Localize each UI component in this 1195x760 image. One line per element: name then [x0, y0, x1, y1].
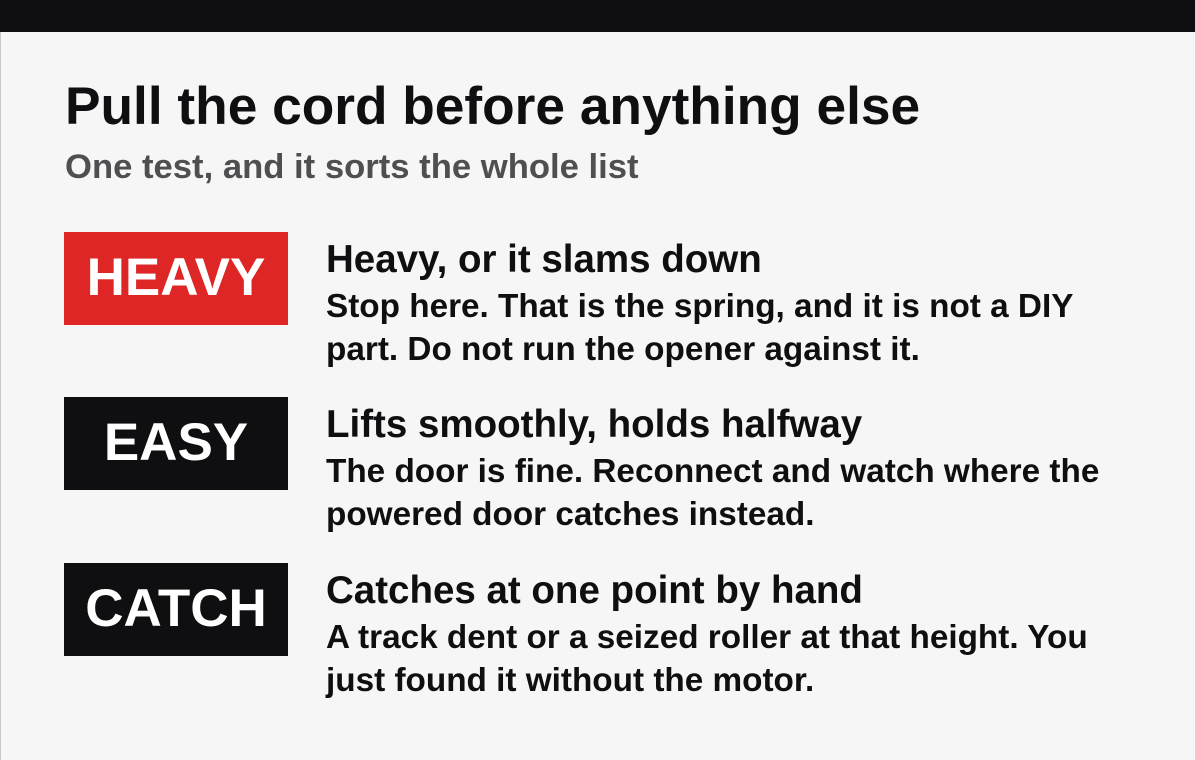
top bar [0, 0, 1195, 32]
description: catch: A track dent or a seized roller at that height. You [326, 619, 1088, 656]
description: heavy: part. Do not run the opener against it. [326, 331, 920, 368]
panel: easy row [64, 397, 1099, 533]
title: Pull the cord before anything else [65, 77, 920, 136]
left edge line [0, 0, 1, 760]
badge: easy [64, 397, 288, 490]
panel: heavy row [64, 232, 1073, 368]
heading: heavy: Heavy, or it slams down [326, 238, 762, 281]
description: easy [326, 453, 1099, 533]
badge: easy: EASY [104, 413, 248, 472]
badge: catch [64, 563, 288, 656]
subtitle: One test, and it sorts the whole list [65, 148, 639, 186]
description: easy: powered door catches instead. [326, 496, 814, 533]
description: heavy [326, 288, 1073, 368]
description: catch [325, 619, 1088, 699]
badge: heavy [64, 232, 288, 325]
badge: heavy: HEAVY [87, 248, 265, 307]
heading: catch: Catches at one point by hand [326, 569, 863, 612]
description: heavy: Stop here. That is the spring, and it is not a DIY [326, 288, 1073, 325]
description: catch: just found it without the motor. [326, 662, 814, 699]
badge: catch: CATCH [85, 579, 267, 638]
heading: easy: Lifts smoothly, holds halfway [326, 403, 862, 446]
panel: catch row [64, 563, 1088, 699]
description: easy: The door is fine. Reconnect and watch where the [326, 453, 1099, 490]
